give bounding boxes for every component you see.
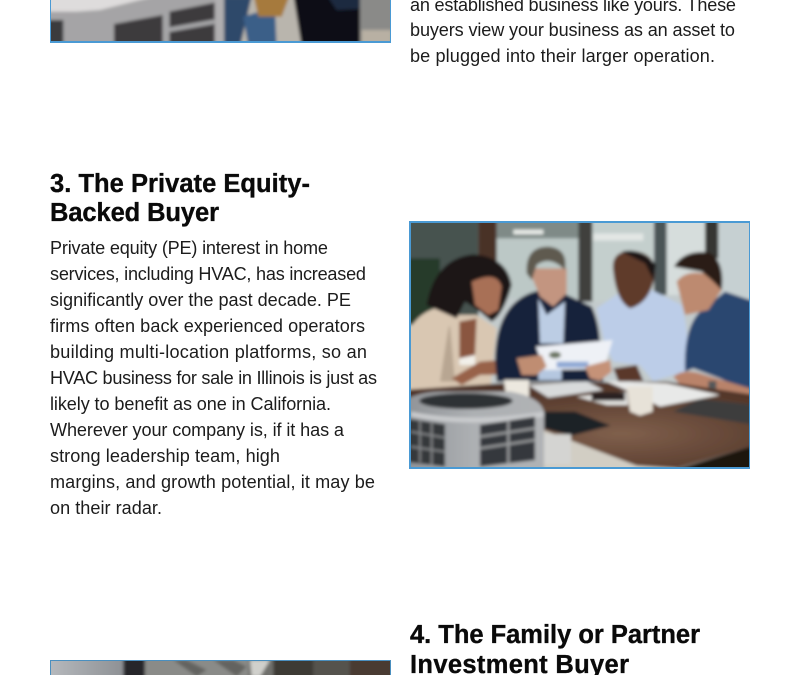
text block: private equity description: services, including HVAC, has increased — [50, 264, 366, 284]
table — [403, 382, 755, 468]
heading: 4. The Family or Partner Investment Buyer: 4. The Family or Partner — [410, 621, 700, 649]
heading: 3. The Private Equity-Backed Buyer: Backed Buyer — [50, 199, 219, 227]
text block: private equity description: likely to benefit as one in California. — [50, 394, 331, 414]
heading: 3. The Private Equity-Backed Buyer: 3. The Private Equity- — [50, 170, 310, 198]
photo: HVAC unit and legs of two people, top left — [50, 0, 391, 43]
text block: private equity description: Private equity (PE) interest in home — [50, 238, 328, 258]
text block: private equity description: margins, and growth potential, it may be — [50, 472, 375, 492]
text block: private equity description: building multi-location platforms, so an — [50, 342, 367, 362]
man in suit — [495, 291, 603, 382]
text block: private equity description: HVAC business for sale in Illinois is just as — [50, 368, 377, 388]
photo: four people reviewing a report beside an HVAC unit — [403, 215, 757, 478]
background — [411, 223, 749, 387]
text block: private equity description: firms often back experienced operators — [50, 316, 365, 336]
heading: 4. The Family or Partner Investment Buyer — [410, 621, 700, 675]
man light blue — [597, 290, 688, 381]
text block: private equity description — [50, 238, 377, 518]
text block: private equity description: on their radar. — [50, 498, 162, 518]
woman — [405, 307, 497, 392]
photo: top edge of next section image — [50, 660, 391, 675]
man right — [685, 292, 755, 395]
HVAC unit — [403, 392, 544, 472]
text block: private equity description: Wherever your company is, if it has a — [50, 420, 345, 440]
text block: end of previous section — [410, 0, 736, 66]
text block: private equity description: significantly over the past decade. PE — [50, 290, 351, 310]
report — [536, 340, 613, 370]
text block: private equity description: strong leadership team, high — [50, 446, 280, 466]
text block: end of previous section: be plugged into their larger operation. — [410, 46, 715, 66]
floor — [544, 431, 744, 467]
heading: 3. The Private Equity-Backed Buyer — [50, 170, 310, 227]
text block: end of previous section: buyers view your business as an asset to — [410, 20, 735, 40]
